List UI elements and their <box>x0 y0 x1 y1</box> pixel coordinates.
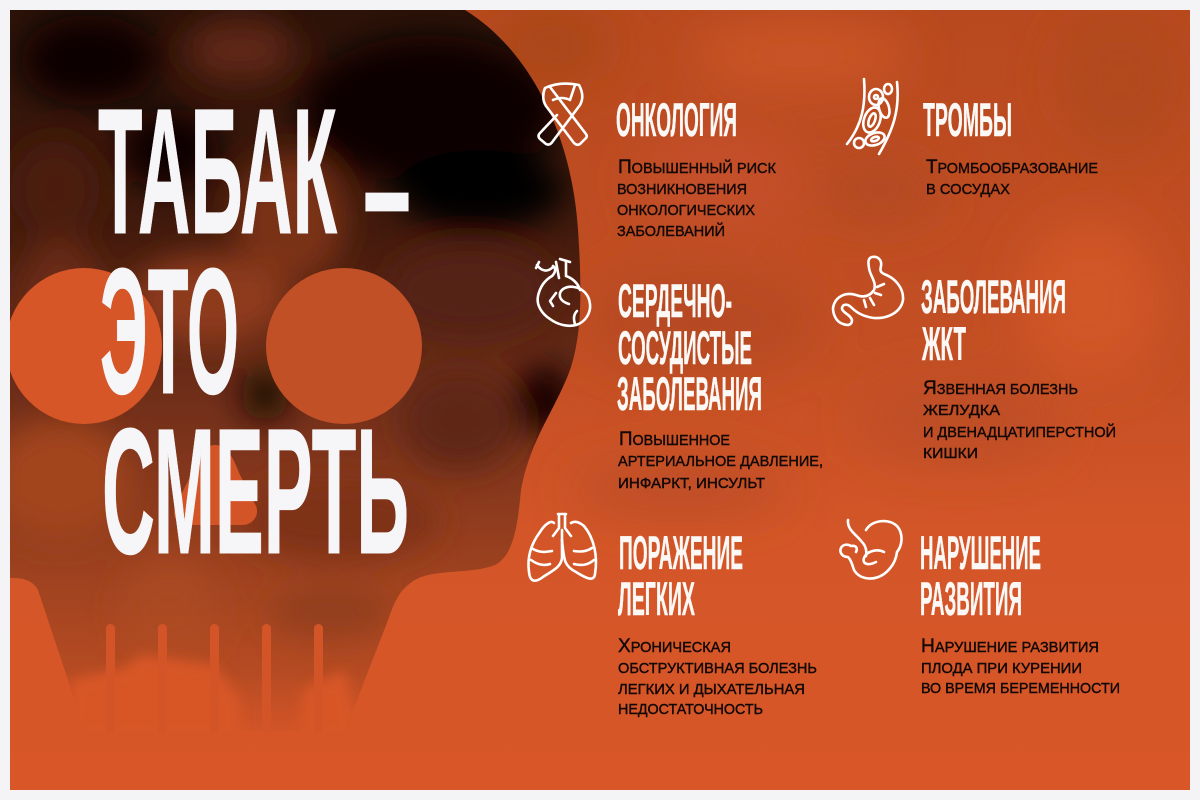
block: fetal development <box>840 520 1120 697</box>
description: НЕДОСТАТОЧНОСТЬ <box>618 702 763 718</box>
heading <box>617 274 762 420</box>
icon: stomach <box>833 257 903 325</box>
icon: fetus <box>840 520 902 579</box>
description: ТРОМБООБРАЗОВАНИЕ <box>926 157 1098 178</box>
description: ВО ВРЕМЯ БЕРЕМЕННОСТИ <box>921 681 1120 697</box>
block: cardiovascular: ЗАБОЛЕВАНИЯ <box>617 367 762 420</box>
block: thrombi <box>847 79 1098 198</box>
description <box>618 429 823 492</box>
description <box>926 157 1098 198</box>
description: В СОСУДАХ <box>926 182 1010 198</box>
heading <box>618 526 743 625</box>
block: fetal development: РАЗВИТИЯ <box>920 572 1022 625</box>
description: ПОВЫШЕННЫЙ РИСК <box>618 157 777 178</box>
icon: blood vessel <box>847 79 898 154</box>
description <box>923 378 1116 462</box>
text: СМЕРТЬ <box>102 391 409 591</box>
description: И ДВЕНАДЦАТИПЕРСТНОЙ <box>923 423 1116 441</box>
heading <box>920 526 1041 625</box>
description: ЯЗВЕННАЯ БОЛЕЗНЬ <box>923 378 1078 399</box>
block: lungs <box>528 514 817 718</box>
title: ЭТО <box>100 231 239 431</box>
teeth <box>106 624 323 716</box>
description: ОНКОЛОГИЧЕСКИХ <box>617 203 755 219</box>
eye: left <box>6 268 162 424</box>
heading <box>921 270 1066 370</box>
heading: ЖКТ <box>922 317 966 370</box>
block: thrombi: ТРОМБЫ <box>923 93 1012 146</box>
description: ЗАБОЛЕВАНИЙ <box>617 222 725 240</box>
title <box>98 71 411 591</box>
description: КИШКИ <box>923 446 978 462</box>
icon: lungs <box>528 514 596 581</box>
block: oncology <box>538 84 777 240</box>
description: ОБСТРУКТИВНАЯ БОЛЕЗНЬ <box>618 661 817 677</box>
description: НАРУШЕНИЕ РАЗВИТИЯ <box>921 636 1099 657</box>
eye: right <box>266 268 422 424</box>
icon: ribbon <box>538 84 587 145</box>
description <box>617 157 777 240</box>
description: ИНФАРКТ, ИНСУЛЬТ <box>618 476 765 492</box>
description <box>921 636 1120 697</box>
block: cardiovascular: СОСУДИСТЫЕ <box>618 321 752 374</box>
block: gastrointestinal <box>833 257 1116 462</box>
block: cardiovascular <box>536 259 823 492</box>
description: ХРОНИЧЕСКАЯ <box>618 636 731 657</box>
description <box>618 636 817 718</box>
icon: heart <box>536 259 590 326</box>
text: – <box>363 88 411 288</box>
nose <box>174 445 257 525</box>
block: oncology: ОНКОЛОГИЯ <box>616 93 737 146</box>
description: ЖЕЛУДКА <box>923 403 1000 419</box>
block: lungs: ПОРАЖЕНИЕ <box>619 526 743 579</box>
heading: СЕРДЕЧНО- <box>618 274 732 327</box>
description: ЛЕГКИХ И ДЫХАТЕЛЬНАЯ <box>618 682 805 698</box>
title: ТАБАК <box>98 71 337 271</box>
description: ПОВЫШЕННОЕ <box>619 429 730 450</box>
description: ПЛОДА ПРИ КУРЕНИИ <box>921 661 1082 677</box>
description: АРТЕРИАЛЬНОЕ ДАВЛЕНИЕ, <box>618 454 823 470</box>
description: ВОЗНИКНОВЕНИЯ <box>617 182 747 198</box>
panel: skull silhouette with smoke <box>0 10 610 740</box>
heading: ЛЕГКИХ <box>618 572 695 625</box>
